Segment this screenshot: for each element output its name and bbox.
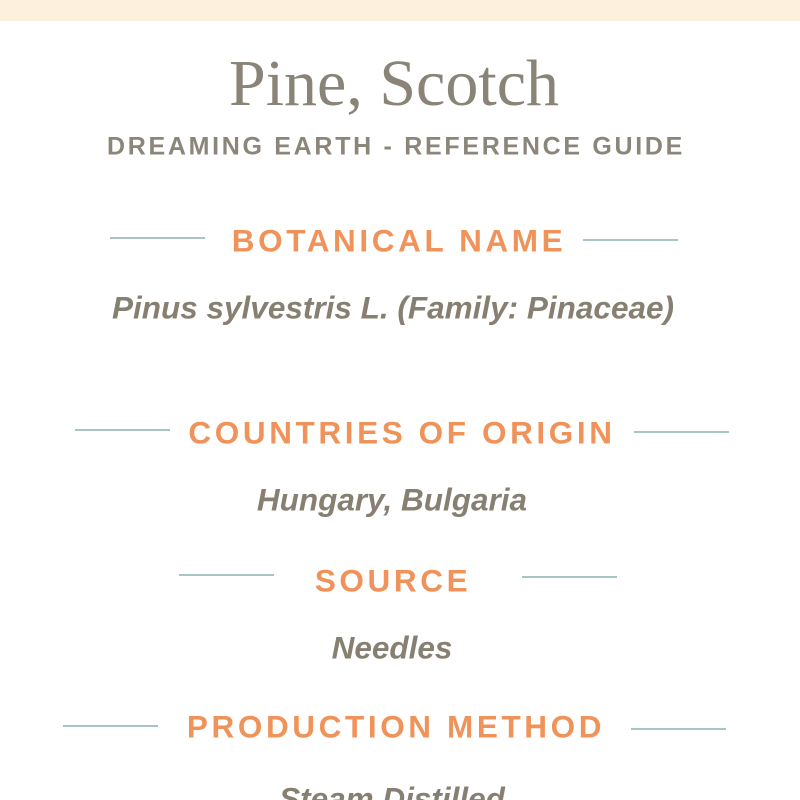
- text: countries: Hungary, Bulgaria: [257, 482, 527, 518]
- section: botanical name: [110, 222, 678, 326]
- section: countries: [75, 414, 729, 518]
- section: production: [63, 708, 726, 800]
- text: botanical name: Pinus sylvestris L. (Family: Pinaceae): [112, 290, 674, 326]
- title: Pine, Scotch: [229, 47, 559, 120]
- heading: countries: COUNTRIES OF ORIGIN: [188, 414, 616, 450]
- subtitle: DREAMING EARTH - REFERENCE GUIDE: [107, 132, 685, 160]
- top band: [0, 0, 800, 21]
- heading: botanical name: BOTANICAL NAME: [232, 222, 566, 258]
- heading: production: PRODUCTION METHOD: [187, 708, 605, 744]
- section: source: [179, 562, 617, 666]
- heading: source: SOURCE: [315, 562, 471, 598]
- text: source: Needles: [332, 630, 452, 666]
